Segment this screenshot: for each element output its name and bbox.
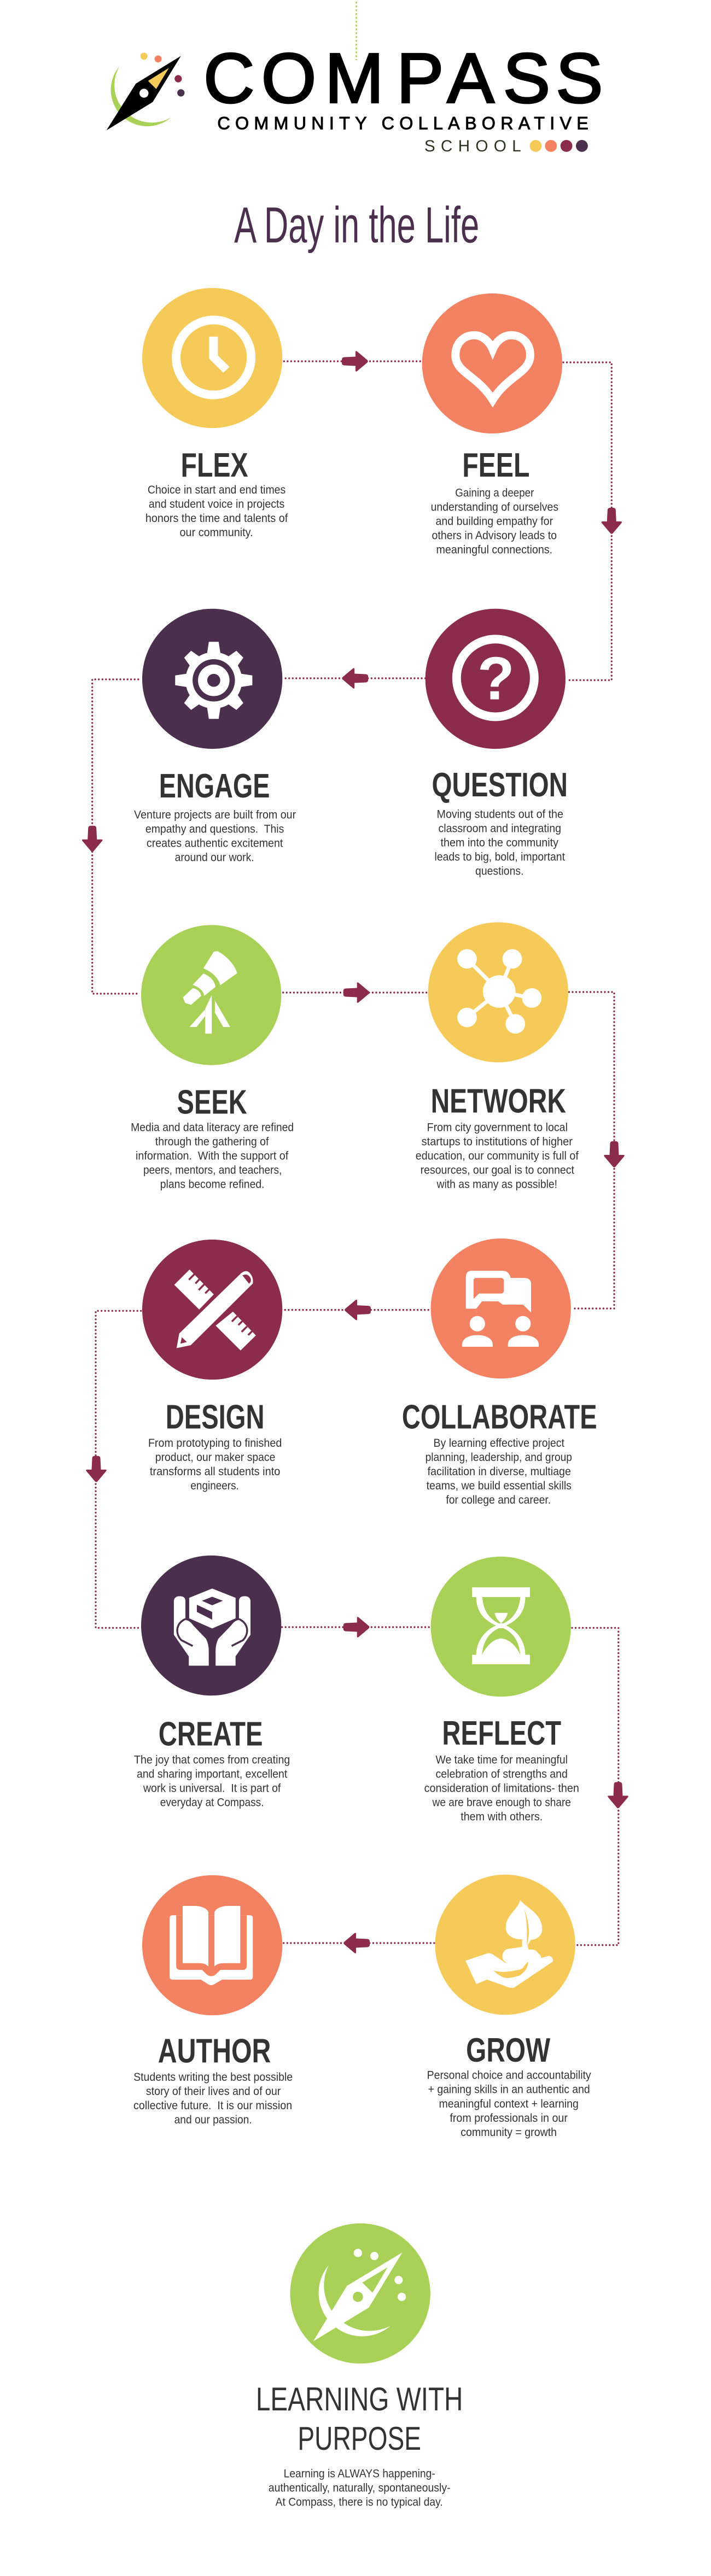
description: FLEX: our community. bbox=[180, 526, 253, 539]
description: NETWORK bbox=[416, 1121, 579, 1190]
description: CREATE: and sharing important, excellent bbox=[137, 1768, 287, 1780]
step: FEEL bbox=[422, 294, 562, 556]
description: NETWORK: resources, our goal is to connect bbox=[421, 1164, 574, 1176]
description: DESIGN: engineers. bbox=[190, 1480, 239, 1492]
connector: CREATE to REFLECT bbox=[282, 1617, 430, 1638]
description: FEEL: understanding of ourselves bbox=[431, 501, 558, 513]
description: QUESTION: leads to big, bold, important bbox=[435, 850, 565, 863]
description: REFLECT bbox=[424, 1753, 579, 1823]
closing text: At Compass, there is no typical day. bbox=[276, 2496, 443, 2509]
heading: LEARNING WITH PURPOSE: LEARNING WITH bbox=[256, 2380, 463, 2417]
closing: learning with purpose bbox=[256, 2223, 463, 2509]
connector: DESIGN to CREATE bbox=[86, 1311, 141, 1628]
description: ENGAGE: around our work. bbox=[175, 851, 254, 864]
description: REFLECT: consideration of limitations- then bbox=[424, 1782, 579, 1794]
icon: network nodes bbox=[428, 922, 568, 1063]
description: REFLECT: We take time for meaningful bbox=[436, 1753, 568, 1766]
icon: hourglass bbox=[431, 1557, 571, 1697]
connector: SEEK to NETWORK bbox=[283, 982, 427, 1003]
description: COLLABORATE bbox=[426, 1437, 572, 1506]
heading: REFLECT: REFLECT bbox=[442, 1714, 561, 1752]
description: DESIGN bbox=[148, 1437, 282, 1492]
closing text: Learning is ALWAYS happening- bbox=[284, 2467, 435, 2480]
description: COLLABORATE: for college and career. bbox=[446, 1494, 551, 1506]
description: SEEK: peers, mentors, and teachers, bbox=[143, 1164, 282, 1176]
step: NETWORK bbox=[416, 922, 579, 1190]
step: SEEK bbox=[131, 925, 294, 1190]
description: GROW: + gaining skills in an authentic and bbox=[428, 2084, 590, 2096]
step: COLLABORATE bbox=[402, 1239, 597, 1506]
step: ENGAGE bbox=[134, 609, 296, 864]
description: GROW: community = growth bbox=[461, 2126, 557, 2139]
step: REFLECT bbox=[424, 1557, 579, 1823]
icon: heart bbox=[422, 294, 562, 433]
description: AUTHOR bbox=[133, 2071, 293, 2126]
description: FEEL: Gaining a deeper bbox=[455, 486, 534, 499]
heading: FLEX: FLEX bbox=[181, 446, 248, 484]
icon: question mark: ? bbox=[477, 644, 515, 713]
description: NETWORK: startups to institutions of higher bbox=[422, 1135, 573, 1148]
heading: DESIGN: DESIGN bbox=[166, 1398, 265, 1436]
description: ENGAGE bbox=[134, 808, 296, 864]
wordmark: COMMUNITY COLLABORATIVE: COMMUNITY COLLABORATIVE bbox=[217, 114, 588, 133]
connector: REFLECT to GROW bbox=[572, 1628, 628, 1945]
icon: open book bbox=[142, 1875, 282, 2015]
description: COLLABORATE: teams, we build essential skills bbox=[427, 1480, 572, 1492]
icon: white compass on green circle bbox=[290, 2223, 430, 2363]
description: CREATE: work is universal. It is part of bbox=[143, 1782, 281, 1794]
description: FEEL: others in Advisory leads to bbox=[432, 529, 557, 542]
heading: ENGAGE: ENGAGE bbox=[159, 767, 270, 805]
description: FLEX: honors the time and talents of bbox=[145, 512, 288, 525]
heading: COLLABORATE: COLLABORATE bbox=[402, 1398, 597, 1436]
icon: compass needle logo bbox=[107, 52, 184, 130]
heading: AUTHOR: AUTHOR bbox=[158, 2032, 271, 2070]
step: DESIGN bbox=[142, 1240, 282, 1492]
description: GROW: from professionals in our bbox=[450, 2112, 568, 2125]
step: AUTHOR bbox=[133, 1875, 293, 2126]
description: QUESTION: classroom and integrating bbox=[438, 822, 561, 835]
icon: gear bbox=[142, 609, 282, 749]
step: GROW bbox=[427, 1875, 591, 2139]
heading: QUESTION: QUESTION bbox=[432, 766, 568, 804]
heading: SEEK: SEEK bbox=[177, 1083, 247, 1121]
description: COLLABORATE: facilitation in diverse, multiage bbox=[428, 1465, 571, 1478]
description: NETWORK: with as many as possible! bbox=[436, 1178, 557, 1190]
description: FLEX: Choice in start and end times bbox=[148, 484, 285, 496]
description: QUESTION: them into the community bbox=[440, 836, 559, 849]
description: SEEK: Media and data literacy are refined bbox=[131, 1121, 294, 1134]
description: NETWORK: From city government to local bbox=[427, 1121, 568, 1134]
header: school logo bbox=[107, 39, 603, 254]
description: NETWORK: education, our community is full of bbox=[416, 1149, 579, 1162]
icon: clock bbox=[142, 288, 282, 428]
closing text: authentically, naturally, spontaneously- bbox=[269, 2481, 451, 2494]
icon: telescope bbox=[141, 925, 281, 1065]
description: AUTHOR: collective future. It is our mission bbox=[133, 2099, 292, 2112]
wordmark: SCHOOL with dots bbox=[424, 137, 588, 155]
description: FEEL: meaningful connections. bbox=[436, 543, 552, 556]
description: CREATE: The joy that comes from creating bbox=[134, 1753, 290, 1766]
description: SEEK bbox=[131, 1121, 294, 1190]
connector: GROW to AUTHOR bbox=[282, 1933, 434, 1953]
icon: hand holding seedling bbox=[435, 1875, 575, 2015]
closing text bbox=[269, 2467, 451, 2509]
description: COLLABORATE: planning, leadership, and group bbox=[426, 1451, 572, 1464]
description: CREATE bbox=[134, 1753, 290, 1809]
description: AUTHOR: and our passion. bbox=[174, 2114, 252, 2126]
wordmark: SCHOOL with dots: SCHOOL bbox=[424, 137, 521, 155]
description: QUESTION: questions. bbox=[475, 865, 523, 877]
description: AUTHOR: Students writing the best possible bbox=[133, 2071, 293, 2084]
description: REFLECT: them with others. bbox=[461, 1811, 543, 1823]
description: GROW: meaningful context + learning bbox=[439, 2098, 579, 2110]
description: REFLECT: we are brave enough to share bbox=[432, 1796, 571, 1809]
connector: ENGAGE to SEEK bbox=[82, 679, 138, 994]
decorative top dotted line bbox=[356, 2, 357, 60]
description: REFLECT: celebration of strengths and bbox=[436, 1768, 568, 1780]
description: ENGAGE: Venture projects are built from our bbox=[134, 808, 296, 821]
heading: CREATE: CREATE bbox=[159, 1715, 263, 1753]
description: ENGAGE: empathy and questions. This bbox=[145, 823, 284, 835]
connector: FEEL to QUESTION bbox=[563, 362, 622, 680]
description: FEEL: and building empathy for bbox=[436, 515, 553, 527]
step: QUESTION bbox=[426, 609, 568, 877]
description: QUESTION bbox=[435, 808, 565, 877]
connector: QUESTION to ENGAGE bbox=[282, 668, 426, 689]
connector: NETWORK to COLLABORATE bbox=[569, 992, 625, 1308]
step: CREATE bbox=[134, 1556, 290, 1809]
icon: hands holding box bbox=[141, 1556, 281, 1695]
description: AUTHOR: story of their lives and of our bbox=[146, 2085, 281, 2098]
heading: FEEL: FEEL bbox=[462, 446, 529, 484]
description: ENGAGE: creates authentic excitement bbox=[147, 837, 283, 849]
description: DESIGN: transforms all students into bbox=[150, 1465, 280, 1478]
description: DESIGN: From prototyping to finished bbox=[148, 1437, 282, 1450]
description: GROW: Personal choice and accountability bbox=[427, 2069, 591, 2082]
title: A Day in the Life bbox=[234, 197, 479, 254]
wordmark: COMPASS: COMPASS bbox=[203, 39, 603, 118]
heading: LEARNING WITH PURPOSE bbox=[256, 2380, 463, 2457]
description: SEEK: through the gathering of bbox=[155, 1135, 269, 1148]
connector: COLLABORATE to DESIGN bbox=[284, 1300, 428, 1320]
connector: FLEX to FEEL bbox=[284, 351, 421, 372]
description: DESIGN: product, our maker space bbox=[155, 1451, 275, 1464]
description: GROW bbox=[427, 2069, 591, 2139]
icon: question mark bbox=[426, 609, 566, 749]
description: FLEX bbox=[145, 484, 288, 539]
description: CREATE: everyday at Compass. bbox=[160, 1796, 264, 1809]
description: FEEL bbox=[431, 486, 558, 556]
icon: people with speech bubbles bbox=[431, 1239, 571, 1378]
heading: LEARNING WITH PURPOSE: PURPOSE bbox=[298, 2420, 421, 2457]
description: FLEX: and student voice in projects bbox=[149, 498, 284, 510]
description: COLLABORATE: By learning effective project bbox=[434, 1437, 564, 1450]
description: QUESTION: Moving students out of the bbox=[437, 808, 563, 820]
description: SEEK: plans become refined. bbox=[160, 1178, 265, 1190]
description: SEEK: information. With the support of bbox=[136, 1149, 288, 1162]
heading: GROW: GROW bbox=[466, 2031, 550, 2069]
step: FLEX bbox=[142, 288, 288, 539]
heading: NETWORK: NETWORK bbox=[431, 1082, 566, 1120]
icon: pencil and ruler bbox=[142, 1240, 282, 1380]
